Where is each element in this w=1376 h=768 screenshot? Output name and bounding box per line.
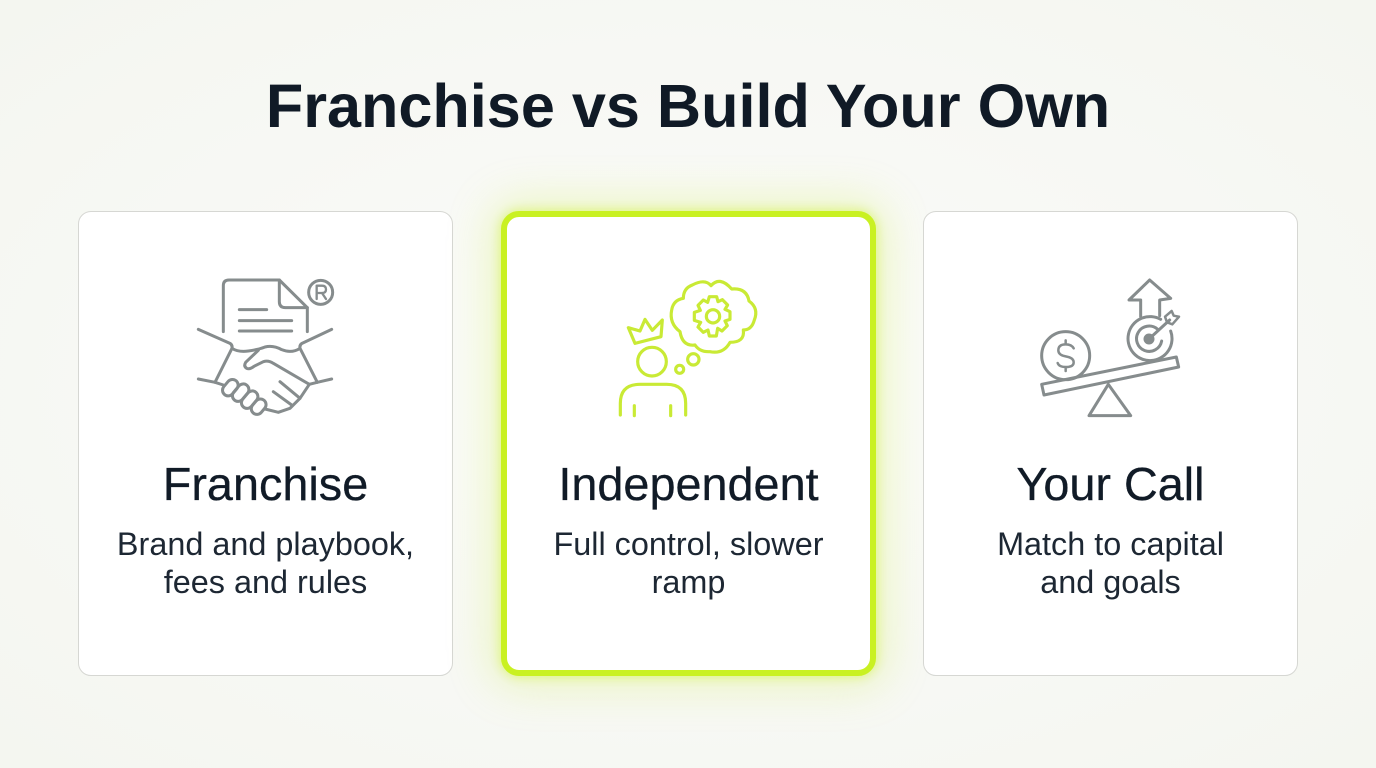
text: independent description	[553, 526, 824, 600]
text: franchise description	[117, 526, 414, 600]
text: your call description	[997, 526, 1224, 600]
icon: contract and handshake	[196, 278, 334, 416]
panel: franchise	[78, 211, 453, 676]
icon: crowned person with thought cloud	[618, 280, 758, 418]
panel: your call	[923, 211, 1298, 676]
icon: balance with money and target	[1040, 278, 1180, 418]
text: franchise description: Brand and playbook,	[117, 526, 414, 562]
text: franchise description: fees and rules	[164, 564, 367, 600]
panel: independent (highlighted)	[501, 211, 876, 676]
title: Franchise vs Build Your Own	[266, 72, 1110, 140]
heading: your call: Your Call	[1016, 458, 1205, 510]
text: your call description: and goals	[1040, 564, 1181, 600]
text: independent description: Full control, slower	[553, 526, 824, 562]
text: your call description: Match to capital	[997, 526, 1224, 562]
heading: franchise: Franchise	[163, 458, 368, 510]
heading: independent: Independent	[558, 458, 819, 510]
text: independent description: ramp	[652, 564, 725, 600]
